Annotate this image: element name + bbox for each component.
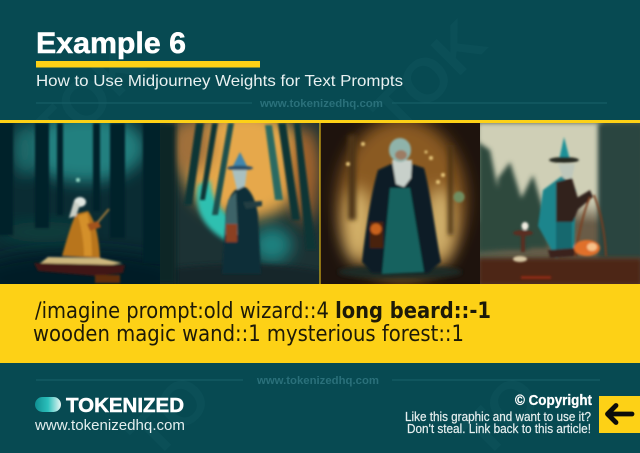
prompt line 1: /imagine prompt:old wizard::4 long beard::-1 [35, 299, 491, 324]
title: Example 6 [36, 27, 186, 60]
prompt band [0, 284, 640, 363]
copyright notice: Don't steal. Link back to this article! [407, 422, 591, 436]
copyright notice [405, 393, 592, 436]
top watermark url: www.tokenizedhq.com [259, 98, 383, 110]
copyright notice: © Copyright [515, 393, 592, 409]
logo [35, 395, 184, 417]
top yellow rule [0, 120, 640, 123]
copyright notice: Like this graphic and want to use it? [405, 410, 591, 424]
icon: logo pill [35, 397, 61, 412]
icon: arrow box [599, 396, 640, 433]
bottom watermark url: www.tokenizedhq.com [256, 375, 379, 387]
prompt line 2: wooden magic wand::1 mysterious forest::1 [33, 322, 464, 347]
title underline [36, 61, 260, 68]
logo wordmark: TOKENIZED [66, 395, 184, 417]
image: wizard with book in dark forest [0, 123, 160, 284]
subtitle: How to Use Midjourney Weights for Text Prompts [36, 73, 403, 90]
image divider [320, 123, 321, 284]
image: old wizard with long white beard [320, 118, 480, 284]
image: wizard with blue hat in amber forest [160, 123, 320, 284]
text: TOK [359, 7, 499, 148]
image: small wizard with cauldron in misty forest [470, 123, 640, 286]
text: TOK [17, 29, 158, 169]
website url: www.tokenizedhq.com [34, 417, 185, 434]
